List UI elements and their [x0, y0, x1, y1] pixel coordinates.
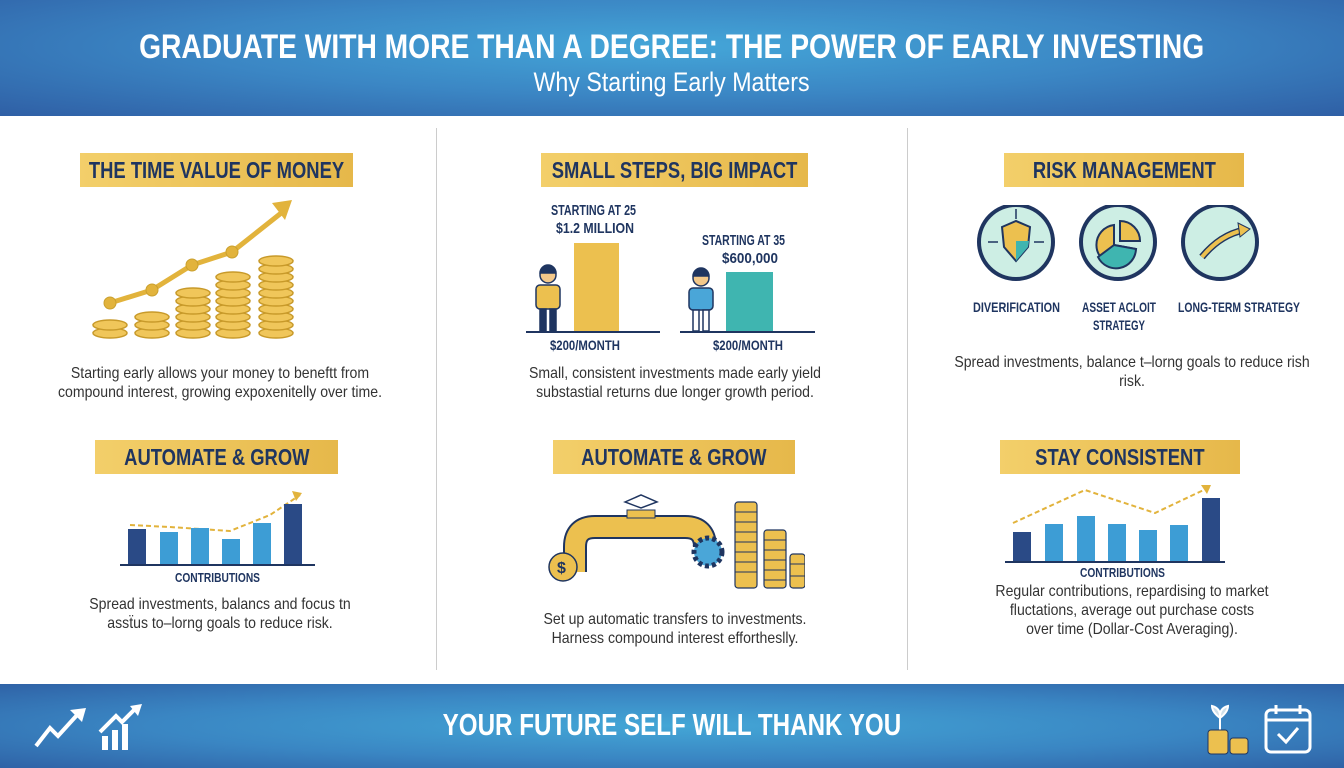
bar comparison chart: STARTING AT 25 [551, 202, 636, 219]
icons: ASSET ACLOIT [1082, 299, 1156, 315]
panel: stay consistent [995, 440, 1269, 638]
heading: THE TIME VALUE OF MONEY [89, 156, 344, 182]
text: Spread investments, balance t–lorng goals to reduce rish [954, 354, 1310, 371]
heading: AUTOMATE & GROW [581, 444, 767, 470]
text: assẗus to–lorng goals to reduce risk. [107, 615, 333, 632]
text: compound interest, growing expoxenitelly over time. [58, 384, 382, 401]
icons [973, 205, 1300, 333]
footer text: YOUR FUTURE SELF WILL THANK YOU [443, 707, 901, 742]
bar comparison chart: $200/MONTH [713, 337, 783, 353]
panel: time value of money [58, 153, 382, 401]
footer [0, 684, 1344, 768]
text: risk. [1119, 373, 1145, 390]
text: over time (Dollar-Cost Averaging). [1026, 621, 1238, 638]
heading [1004, 153, 1244, 187]
text [954, 354, 1310, 390]
heading: SMALL STEPS, BIG IMPACT [552, 156, 797, 182]
heading [1000, 440, 1240, 474]
text [529, 365, 821, 401]
icon: growth arrows [34, 704, 142, 750]
text: fluctations, average out purchase costs [1010, 602, 1254, 619]
bar chart: CONTRIBUTIONS [175, 570, 260, 585]
pipe and coins illustration [548, 494, 805, 589]
subtitle: Why Starting Early Matters [534, 67, 810, 97]
text: substastial returns due longer growth period. [536, 384, 814, 401]
panel: risk management [954, 153, 1310, 390]
text: Set up automatic transfers to investments. [544, 611, 806, 628]
pipe and coins illustration: $ [557, 560, 566, 577]
text: Regular contributions, repardising to market [995, 583, 1269, 600]
bar comparison chart: $600,000 [722, 250, 778, 267]
bar comparison chart: $200/MONTH [550, 337, 620, 353]
icons: STRATEGY [1093, 317, 1145, 333]
text: Harness compound interest effortheslly. [552, 630, 798, 647]
bar comparison chart: STARTING AT 35 [702, 232, 785, 249]
text: Spread investments, balancs and focus tn [89, 596, 351, 613]
text: Starting early allows your money to beneftt from [71, 365, 369, 382]
heading [553, 440, 795, 474]
heading [95, 440, 338, 474]
heading: RISK MANAGEMENT [1032, 156, 1215, 182]
text [995, 583, 1269, 638]
panel: automate & grow 2 [544, 440, 806, 647]
bar chart [120, 491, 315, 585]
header [0, 0, 1344, 116]
text [544, 611, 806, 647]
bar comparison chart: $1.2 MILLION [556, 220, 634, 237]
bar comparison chart [526, 202, 815, 353]
text [58, 365, 382, 401]
panel: automate & grow 1 [89, 440, 351, 632]
icon: coins and calendar [1208, 704, 1312, 754]
panel: small steps [526, 153, 821, 401]
chart: coins growth [92, 200, 294, 339]
bar chart [1005, 485, 1225, 580]
title: GRADUATE WITH MORE THAN A DEGREE: THE POWER OF EARLY INVESTING [139, 28, 1205, 66]
icons: DIVERIFICATION [973, 299, 1060, 315]
text: Small, consistent investments made early yield [529, 365, 821, 382]
heading: AUTOMATE & GROW [124, 444, 309, 470]
heading: STAY CONSISTENT [1035, 444, 1205, 470]
bar chart: CONTRIBUTIONS [1080, 565, 1165, 580]
text [89, 596, 351, 632]
